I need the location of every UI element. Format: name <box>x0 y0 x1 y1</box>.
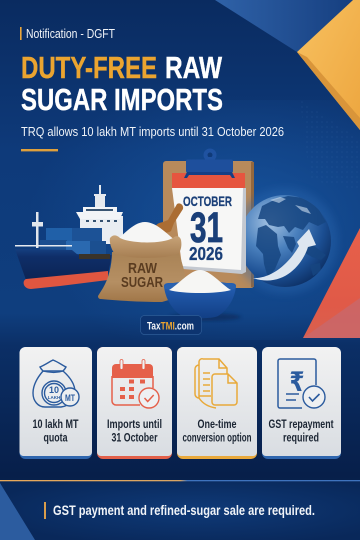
card: 10 lakh MT quota <box>20 347 92 459</box>
brand badge: TaxTMI.com <box>147 320 194 332</box>
title: DUTY-FREE <box>21 50 157 85</box>
icon: sack with coins: LAKH <box>48 395 60 400</box>
card label: 31 October <box>112 432 158 444</box>
illustration: calendar: OCTOBER <box>183 193 232 209</box>
card label <box>107 419 162 444</box>
card label <box>182 419 252 444</box>
footer separator <box>0 480 360 481</box>
card label <box>268 419 334 444</box>
title: RAW <box>165 50 223 85</box>
card: GST repayment required <box>262 347 341 459</box>
illustration: cargo ship <box>15 185 123 289</box>
card: one-time conversion option <box>177 347 257 459</box>
land masses <box>256 196 326 278</box>
subtitle: TRQ allows 10 lakh MT imports until 31 October 2026 <box>21 125 284 139</box>
illustration: globe with arrow <box>239 190 336 293</box>
illustration: calendar: 31 <box>190 204 223 252</box>
card label <box>32 419 78 444</box>
icon: documents <box>195 359 237 408</box>
icon: sack with coins: 10 <box>49 385 59 395</box>
illustration: clipboard <box>163 161 254 288</box>
icon: sack with coins: MT <box>65 393 75 403</box>
footer corner facet <box>0 483 35 540</box>
notification tag: Notification - DGFT <box>26 27 115 41</box>
card label: Imports until <box>107 419 162 431</box>
decorative corner: red facet <box>303 228 360 338</box>
card label: required <box>283 432 319 444</box>
illustration: calendar <box>172 148 246 274</box>
card label: GST repayment <box>268 419 334 431</box>
icon: sack with coins <box>33 360 79 407</box>
card label: quota <box>44 432 68 444</box>
illustration: bowl of sugar <box>164 270 241 321</box>
card label: One-time <box>198 419 236 431</box>
decorative corner: blue and gold facets <box>215 0 360 130</box>
card: imports until 31 October <box>97 347 172 459</box>
icon: calendar with check <box>112 360 159 408</box>
icon: rupee document with check: ₹ <box>290 367 304 398</box>
illustration: raw sugar sack: RAW <box>128 260 158 277</box>
title: SUGAR IMPORTS <box>21 82 223 117</box>
illustration: calendar: 2026 <box>189 244 223 264</box>
illustration: raw sugar sack: SUGAR <box>121 274 163 291</box>
title <box>21 50 223 117</box>
card label: conversion option <box>182 432 252 444</box>
brand badge <box>140 316 202 334</box>
illustration: raw sugar sack <box>98 203 185 302</box>
card label: 10 lakh MT <box>32 419 78 431</box>
gold accent line <box>21 149 58 151</box>
